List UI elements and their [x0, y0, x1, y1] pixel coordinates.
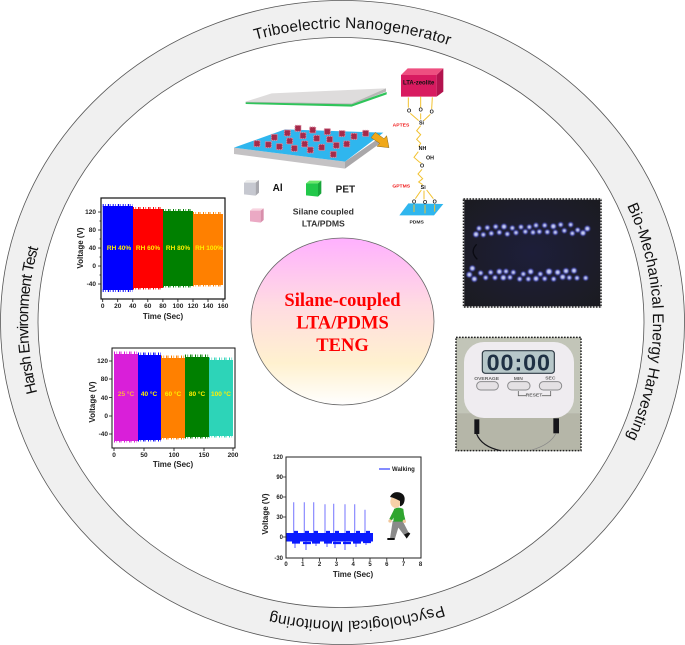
- photo: digital timer: MIN: [514, 376, 523, 382]
- center circle title: LTA/PDMS: [296, 314, 389, 334]
- walking voltage chart: 2: [318, 562, 322, 568]
- walking voltage chart: 6: [385, 562, 389, 568]
- legend: walking: Walking: [392, 467, 415, 473]
- humidity voltage chart: [76, 198, 229, 321]
- molecular structure: O: [407, 108, 411, 114]
- temperature voltage chart: [88, 348, 239, 469]
- device schematic: [234, 68, 443, 229]
- heading: Harsh Environment Test: Harsh Environment Test: [16, 246, 38, 394]
- temperature voltage chart: Time (Sec): [153, 460, 193, 469]
- heading: Triboelectric Nanogenerator: Triboelectric Nanogenerator: [252, 16, 452, 44]
- molecular structure: NH: [419, 146, 427, 152]
- temperature voltage chart: 50: [140, 452, 148, 459]
- voltage trace: [286, 502, 373, 550]
- temperature voltage chart: -40: [99, 431, 108, 438]
- humidity voltage chart: 120: [85, 209, 96, 216]
- molecular structure: O: [430, 110, 434, 116]
- temperature voltage chart: 60 °C: [165, 390, 181, 398]
- molecular structure: O: [412, 200, 416, 206]
- humidity voltage chart: Time (Sec): [143, 312, 183, 321]
- molecular structure: [392, 68, 443, 226]
- temperature voltage chart: 40 °C: [141, 390, 157, 398]
- molecular structure: Si: [421, 185, 426, 191]
- legend: silane coupled LTA/PDMS: LTA/PDMS: [302, 219, 345, 229]
- photo: digital timer: OVERAGE: [474, 376, 500, 382]
- humidity voltage chart: 40: [129, 303, 137, 310]
- photo: digital timer: [456, 337, 581, 451]
- heading: Bio-Mechanical Energy Harvesting: Bio-Mechanical Energy Harvesting: [626, 202, 664, 440]
- photo: illuminated LEDs: [464, 199, 601, 307]
- walking voltage chart: 1: [301, 562, 305, 568]
- temperature voltage chart: 120: [97, 358, 108, 365]
- temperature voltage chart: 80: [101, 376, 108, 383]
- legend: silane coupled LTA/PDMS: Silane coupled: [293, 206, 354, 216]
- walking voltage chart: 120: [273, 455, 284, 461]
- molecular structure: OH: [426, 156, 434, 162]
- top electrode plate: [246, 88, 387, 107]
- molecular structure: Si: [419, 120, 425, 126]
- temperature voltage chart: 80 °C: [189, 390, 205, 398]
- humidity voltage chart: -40: [87, 281, 96, 288]
- humidity voltage chart: 0: [92, 263, 96, 270]
- walking voltage chart: Voltage (V): [261, 493, 270, 535]
- humidity voltage chart: RH 60%: [136, 245, 160, 252]
- icon: walking boy: [387, 492, 410, 540]
- humidity voltage chart: 40: [89, 245, 96, 252]
- walking voltage chart: 90: [276, 475, 284, 481]
- molecular structure: O: [433, 200, 437, 206]
- molecular structure: PDMS: [409, 220, 425, 226]
- photo: digital timer: 00:00: [487, 350, 550, 376]
- humidity voltage chart: RH 80%: [166, 245, 190, 252]
- walking voltage chart: 3: [335, 562, 339, 568]
- walking voltage chart: [261, 455, 423, 579]
- humidity voltage chart: 60: [144, 303, 152, 310]
- humidity voltage chart: RH 40%: [107, 245, 131, 252]
- molecular structure: LTA-zeolite: [403, 80, 435, 86]
- voltage blocks: temperature: [114, 353, 233, 441]
- walking voltage chart: 0: [280, 535, 284, 541]
- molecular structure: O: [419, 108, 423, 114]
- arrow: [371, 132, 389, 148]
- photo: digital timer: RESET: [526, 393, 542, 399]
- temperature voltage chart: 150: [199, 452, 210, 459]
- humidity voltage chart: RH 100%: [195, 245, 223, 252]
- humidity voltage chart: 160: [218, 303, 229, 310]
- temperature voltage chart: 40: [101, 395, 108, 402]
- temperature voltage chart: 0: [104, 413, 108, 420]
- center circle title: Silane-coupled: [284, 291, 401, 311]
- humidity voltage chart: 20: [114, 303, 122, 310]
- center circle title: [251, 238, 434, 405]
- temperature voltage chart: 100 °C: [211, 390, 231, 398]
- molecular structure: GPTMS: [392, 183, 411, 189]
- walking voltage chart: 7: [402, 562, 406, 568]
- legend: walking: [379, 467, 415, 473]
- humidity voltage chart: 0: [101, 303, 105, 310]
- legend: Al: [244, 180, 283, 196]
- temperature voltage chart: Voltage (V): [88, 381, 97, 423]
- legend: PET: PET: [336, 184, 355, 195]
- humidity voltage chart: 120: [188, 303, 199, 310]
- legend: PET: [306, 181, 355, 197]
- LTA particles: [254, 125, 369, 157]
- molecular structure: APTES: [393, 123, 410, 129]
- legend: Al: Al: [273, 183, 283, 194]
- temperature voltage chart: 200: [228, 452, 239, 459]
- center circle title: TENG: [316, 336, 369, 356]
- walking voltage chart: 8: [419, 562, 423, 568]
- humidity voltage chart: 100: [172, 303, 184, 310]
- legend: silane coupled LTA/PDMS: [250, 206, 354, 229]
- walking voltage chart: -30: [274, 556, 284, 562]
- molecular structure: O: [420, 164, 424, 170]
- walking voltage chart: 5: [368, 562, 372, 568]
- temperature voltage chart: 0: [112, 452, 116, 459]
- humidity voltage chart: Voltage (V): [76, 227, 85, 269]
- walking voltage chart: Time (Sec): [333, 570, 373, 579]
- walking voltage chart: 30: [276, 515, 284, 521]
- walking voltage chart: 4: [352, 562, 356, 568]
- walking voltage chart: 0: [284, 562, 288, 568]
- molecular structure: O: [423, 200, 427, 206]
- humidity voltage chart: 80: [159, 303, 167, 310]
- photo: digital timer: SEC: [545, 375, 556, 381]
- heading: Psychological Monitoring: Psychological Monitoring: [270, 606, 445, 632]
- temperature voltage chart: 25 °C: [118, 390, 134, 398]
- voltage blocks: RH: [103, 206, 223, 290]
- humidity voltage chart: 140: [203, 303, 214, 310]
- walking voltage chart: 60: [276, 495, 284, 501]
- temperature voltage chart: 100: [169, 452, 180, 459]
- bottom plate: [234, 129, 383, 169]
- humidity voltage chart: 80: [89, 227, 96, 234]
